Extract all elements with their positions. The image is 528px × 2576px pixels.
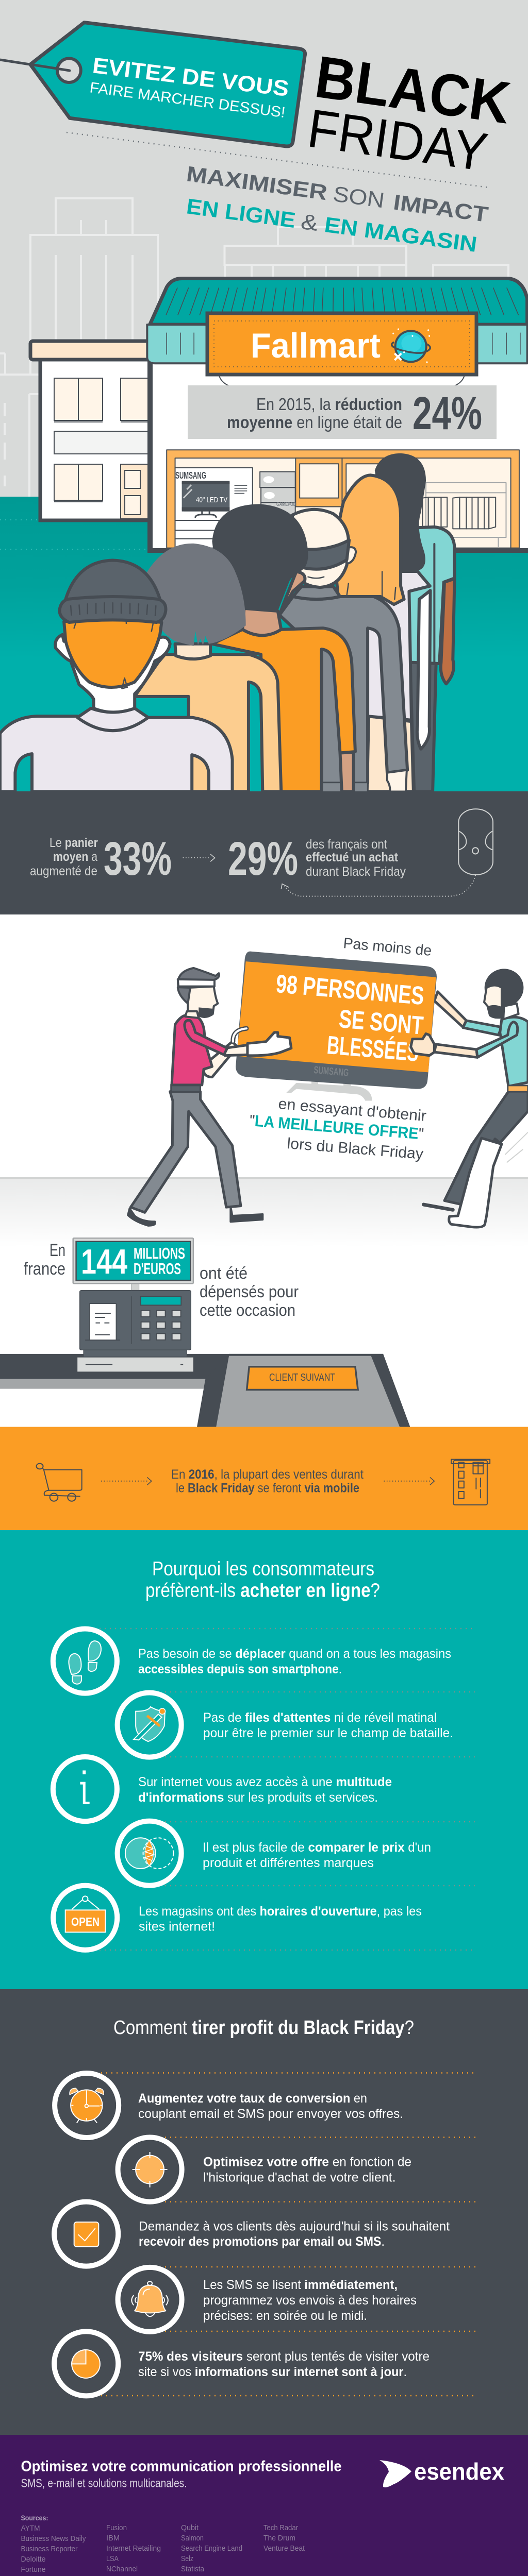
- icon: venn comparison: [118, 1821, 182, 1886]
- icon: open sign: [53, 1886, 117, 1950]
- text: comparer le prix: [203, 1840, 431, 1870]
- tv headline: BLESSÉES: [326, 1030, 420, 1067]
- text: optimisez: [203, 2155, 411, 2185]
- text: promotions: [139, 2219, 450, 2249]
- esendex logo: [380, 2458, 504, 2487]
- person: woman peach sweater: [135, 544, 281, 792]
- stat figure: 29%: 29%: [228, 833, 298, 885]
- discount figure: 24%: [412, 388, 482, 439]
- text: déplacer: [138, 1647, 451, 1676]
- text: en france: En: [50, 1241, 65, 1260]
- tv label: 40'' LED TV: [196, 496, 227, 504]
- text: ont été dépensés: ont été: [200, 1264, 248, 1282]
- stat text: français: durant Black Friday: [306, 865, 406, 879]
- icon: planet logo: [392, 329, 430, 362]
- sources list: NChannel: [106, 2565, 138, 2573]
- text: sms immédiatement: précises: en soirée ou le midi.: [203, 2309, 367, 2323]
- arrow: [384, 1477, 434, 1485]
- text: la meilleure offre: "LA MEILLEURE OFFRE": [249, 1111, 424, 1143]
- sources list: Venture Beat: [263, 2544, 305, 2553]
- text: 2016 mobile: En 2016, la plupart des ventes durant: [171, 1467, 364, 1482]
- text: 75% des visiteurs: site si vos informations sur internet sont à jour.: [138, 2365, 407, 2379]
- sources list: [21, 2514, 305, 2574]
- stat text: français: effectué un achat: [306, 850, 399, 865]
- dotted rules: [100, 1629, 475, 1950]
- icon: pie chart: [54, 2331, 118, 2396]
- panel: footer: [0, 2435, 528, 2576]
- stat text: panier moyen: augmenté de: [30, 864, 97, 878]
- stat figure: 33%: 33%: [104, 833, 172, 885]
- sources list: Business Reporter: [21, 2545, 77, 2553]
- text: 75% des visiteurs: [138, 2349, 430, 2379]
- text: horaires: [139, 1904, 422, 1934]
- sources list: Search Engine Land: [181, 2544, 242, 2553]
- text: déplacer: Pas besoin de se déplacer quand on a tous les magasins: [138, 1647, 451, 1661]
- small building left: [30, 341, 152, 520]
- sources list: AYTM: [21, 2524, 40, 2533]
- stat text: panier moyen: Le panier: [50, 836, 98, 850]
- icon: target: [118, 2138, 182, 2202]
- text: 2016 mobile: le Black Friday se feront via mobile: [176, 1481, 359, 1495]
- register display unit: MILLIONS: [134, 1244, 185, 1262]
- register display unit: D'EUROS: [134, 1260, 181, 1278]
- text: optimisez: l'historique d'achat de votre client.: [203, 2171, 396, 2185]
- counter and register: [0, 1238, 410, 1427]
- store wall: [147, 361, 528, 553]
- text: en essayant: en essayant d'obtenir: [277, 1095, 427, 1125]
- text: taux de conversion: [138, 2091, 403, 2121]
- subtitle line 1: IMPACT: [392, 190, 490, 227]
- icon: shield and sword: [118, 1692, 182, 1757]
- panel: stats band: [0, 791, 528, 914]
- subtitle line 1: SON: [332, 181, 386, 212]
- icon: checkbox: [54, 2202, 118, 2266]
- text: pas moins de: Pas moins de: [342, 935, 433, 959]
- panel: hero with store and queue: [0, 0, 528, 792]
- text: files d'attentes: pour être le premier sur le champ de bataille.: [203, 1726, 453, 1740]
- people queue: [0, 453, 455, 792]
- panel: injured shoppers: [0, 914, 528, 1427]
- sources list: Deloitte: [21, 2555, 45, 2564]
- heading: préfèrent-ils acheter en ligne?: [145, 1580, 380, 1601]
- icon: smartphone outline with arrow: [281, 809, 493, 896]
- tag subline: FAIRE MARCHER DESSUS!: [89, 79, 286, 121]
- counter sign text: CLIENT SUIVANT: [269, 1372, 335, 1383]
- icon: information: [53, 1757, 117, 1821]
- register display unit: [134, 1244, 185, 1278]
- tv brand label: SUMSANG: [175, 470, 206, 481]
- price tag: [0, 23, 305, 146]
- stat text: panier moyen: [30, 836, 98, 878]
- tv brand: SUMSANG: [314, 1064, 349, 1079]
- dotted rules: [101, 2073, 476, 2396]
- text: informations: d'informations sur les produits et services.: [138, 1790, 378, 1805]
- text: déplacer: accessibles depuis son smartphone.: [138, 1662, 342, 1676]
- subtitle line 2: &: [300, 209, 320, 235]
- text: comparer le prix: produit et différentes marques: [203, 1856, 374, 1870]
- footer title: Optimisez votre communication professionnelle: [21, 2459, 341, 2475]
- sources list: IBM: [106, 2534, 120, 2543]
- register display figure: 144: [81, 1242, 127, 1281]
- background buildings: [0, 198, 508, 497]
- shop window: [167, 450, 519, 548]
- television: [236, 952, 437, 1101]
- text: 75% des visiteurs: 75% des visiteurs seront plus tentés de visiter votre: [138, 2349, 430, 2364]
- sources list: The Drum: [263, 2534, 295, 2543]
- arrow: [101, 1477, 152, 1485]
- panel: mobile sales: [0, 1427, 528, 1530]
- icon: footsteps: [53, 1629, 117, 1693]
- sources list: Fusion: [106, 2523, 127, 2532]
- text: ont été dépensés: [200, 1264, 299, 1319]
- subtitle line 1: [185, 161, 490, 227]
- text: 2016 mobile: [171, 1467, 364, 1495]
- text: sms immédiatement: Les SMS se lisent immédiatement,: [203, 2278, 398, 2292]
- tv headline: SE SONT: [338, 1004, 424, 1040]
- store roof and awning: [147, 278, 527, 386]
- heading: Pourquoi les consommateurs: [152, 1558, 374, 1580]
- person: rear woman teal shirt: [375, 453, 455, 792]
- footer subtitle: SMS, e-mail et solutions multicanales.: [21, 2477, 187, 2490]
- text: sms immédiatement: programmez vos envois à des horaires: [203, 2293, 417, 2308]
- icon: shopping cart: [37, 1464, 82, 1501]
- text: taux de conversion: couplant email et SMS pour envoyer vos offres.: [138, 2107, 403, 2121]
- sources list: Tech Radar: [263, 2523, 298, 2532]
- text: promotions: recevoir des promotions par email ou SMS.: [139, 2234, 385, 2249]
- tag headline: EVITEZ DE VOUS: [91, 53, 290, 101]
- text: informations: [138, 1775, 392, 1805]
- text: informations: Sur internet vous avez accès à une multitude: [138, 1775, 392, 1789]
- text: lors du black friday: lors du Black Friday: [286, 1135, 424, 1163]
- text: en france: [24, 1241, 65, 1279]
- subtitle line 1: MAXIMISER: [185, 161, 329, 205]
- text: ont été dépensés: cette occasion: [200, 1301, 295, 1319]
- text: files d'attentes: Pas de files d'attentes ni de réveil matinal: [203, 1710, 437, 1725]
- panel: cash register: [0, 1238, 410, 1427]
- right man upper arm behind tv: [434, 992, 502, 1035]
- text: ont été dépensés: dépensés pour: [200, 1282, 299, 1301]
- person: man orange shirt: [212, 504, 367, 792]
- subtitle line 2: EN LIGNE: [185, 194, 297, 232]
- sources list: Sources:: [21, 2514, 48, 2522]
- panel: comment tirer profit: [0, 1989, 528, 2435]
- text: optimisez: Optimisez votre offre en fonction de: [203, 2155, 411, 2169]
- tv headline: 98 PERSONNES: [275, 969, 425, 1010]
- sources list: Salmon: [181, 2534, 204, 2543]
- sources list: Internet Retailing: [106, 2544, 161, 2553]
- store name: Fallmart: [251, 326, 381, 365]
- heading: [145, 1558, 380, 1601]
- left man arm and bandaged hand: [185, 1020, 291, 1056]
- text: en france: france: [24, 1259, 65, 1279]
- esendex logo: esendex: [414, 2458, 504, 2485]
- text: sms immédiatement: [203, 2278, 417, 2323]
- arrow: [183, 854, 215, 861]
- product boxes label: GAMEPOD: [276, 502, 296, 507]
- discount text: En 2015, la réduction: [256, 395, 402, 414]
- stat text: français: [306, 837, 406, 879]
- person: man with headband: [279, 510, 407, 792]
- sources list: Business News Daily: [21, 2534, 86, 2543]
- sources list: Qubit: [181, 2523, 199, 2532]
- subtitle line 2: EN MAGASIN: [323, 212, 478, 257]
- title: Black: BLACK: [311, 44, 515, 137]
- person: woman with orange hair: [336, 475, 431, 792]
- panel: pourquoi acheter en ligne: [0, 1530, 528, 1989]
- icon: alarm clock: [55, 2073, 119, 2138]
- icon: open sign: OPEN: [71, 1915, 100, 1928]
- person: front man with beanie: [0, 561, 233, 792]
- tv headline: [275, 969, 425, 1067]
- left man body: [128, 968, 262, 1226]
- stat text: panier moyen: moyen a: [53, 850, 97, 864]
- store sign: [207, 313, 476, 375]
- sources list: Statista: [181, 2565, 205, 2573]
- stat text: français: des français ont: [306, 837, 387, 852]
- text: taux de conversion: Augmentez votre taux de conversion en: [138, 2091, 367, 2106]
- sources list: Selz: [181, 2554, 193, 2563]
- text: comparer le prix: Il est plus facile de comparer le prix d'un: [203, 1840, 431, 1855]
- text: horaires: sites internet!: [139, 1920, 215, 1934]
- icon: mobile storefront: [451, 1460, 490, 1505]
- heading: Comment tirer profit du Black Friday?: [113, 2017, 414, 2039]
- text: files d'attentes: [203, 1710, 453, 1740]
- text: promotions: Demandez à vos clients dès aujourd'hui si ils souhaitent: [139, 2219, 450, 2234]
- subtitle line 2: [185, 194, 478, 257]
- discount stat box: [188, 385, 497, 439]
- sources list: Fortune: [21, 2565, 45, 2574]
- sources list: LSA: [106, 2554, 119, 2563]
- discount stat box: moyenne en ligne était de: [227, 413, 402, 432]
- icon: bell: [118, 2267, 182, 2332]
- title: Friday: FRIDAY: [304, 98, 491, 183]
- right man: [411, 969, 528, 1227]
- text: horaires: Les magasins ont des horaires d'ouverture, pas les: [139, 1904, 422, 1919]
- dotted separator: [67, 132, 487, 188]
